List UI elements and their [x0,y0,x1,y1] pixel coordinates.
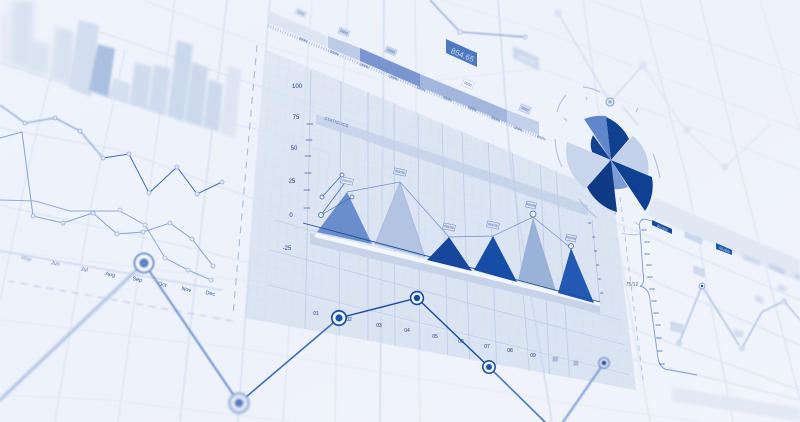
line segment final [563,363,604,422]
bar far-left blurred [0,12,9,64]
triangle tags: 000.00 [342,178,352,184]
bar 11 [185,62,208,127]
triangle 1 [317,192,372,244]
bracket scale ticks: 000 [646,263,652,267]
right dashed line [620,197,643,380]
bracket scale ticks: 000 [655,323,661,327]
axis: tick column right of main chart [588,220,604,304]
network hub node [606,98,614,106]
ruler tags: 0000 [387,48,395,55]
panel grid emphasis lines [268,70,630,385]
ruler tags: 0000 [464,81,472,88]
bar 13 [220,65,241,138]
bracket scale ticks: 000 [656,336,662,340]
right chart node: sharp [699,283,705,289]
ruler percent labels [298,37,546,142]
axis: tick column left of main chart: 0000 [305,154,312,158]
triangle 3 [427,237,472,271]
pie chart [566,116,653,212]
bottom number axis: 11 [573,361,579,367]
node: Sep peak [134,254,154,272]
bar 10 [167,40,193,122]
bar 9 [148,64,171,116]
ruler percent labels: 000% [490,116,500,123]
triangle 6 [558,248,594,303]
bracket scale ticks: 000 [644,240,650,244]
y axis labels: -25 [283,246,292,252]
bracket scale ticks: 000 [653,311,659,315]
node: 01 point [332,311,346,325]
bracket scale ticks: 000 [651,299,657,303]
bar 12 [203,79,223,132]
ruler percent labels: 000% [388,75,398,82]
bar chart: blurred top left [0,0,241,138]
bracket scale ticks [641,228,665,366]
main foreground line chart [0,263,604,422]
axis: tick column right of main chart: 00 [588,221,592,225]
right chart tags [671,266,786,338]
month axis [0,251,222,298]
line segment to low point [144,263,239,403]
triangle 2 [375,182,425,257]
value box: 854.65: 854.65 [449,46,476,64]
axis: tick column right of main chart: 00 [600,291,604,295]
node: last point [599,358,609,368]
triangle tags: 000.00 [566,235,576,241]
bar 5 [69,20,99,97]
tab pale 5 [769,263,785,275]
month labels [21,255,216,298]
value box: 854.65 [446,39,477,67]
pie medium bottom [611,160,628,189]
axis: tick column left of main chart: 0000 [304,188,311,192]
statistics band [316,114,588,216]
month labels: Nov [181,286,192,294]
triangle chart [317,182,594,303]
pie light left [566,142,611,188]
pie dark right [611,160,653,211]
value box: pale [513,46,539,71]
bar 6 dark [89,44,115,97]
triangle tags: 000.00 [444,224,454,230]
axis: tick column left of main chart: 0000 [306,138,313,142]
tab pale 2 [685,232,702,244]
top line with value boxes [430,0,527,39]
bottom number axis: 06 [458,339,464,345]
axis: tick column left of main chart: 0000 [307,122,314,126]
right chart nodes: blurred [676,298,787,351]
month labels: Dec [205,290,216,298]
bottom number axis [313,311,579,367]
line chart: left series 3 [0,200,213,282]
statistics band: STATISTICS [324,116,349,128]
axis: tick column right of main chart: 00 [594,249,598,253]
axis: tick column left of main chart: 0000 [305,171,312,175]
triangle 4 [474,236,517,282]
y axis labels: 50 [291,146,298,152]
bottom number axis: 09 [530,353,536,359]
bar 8 [129,62,152,110]
ruler percent labels: 000% [536,135,546,142]
tab pale 4 [743,254,760,266]
pie ring arcs [555,87,660,220]
node: descending point [483,361,495,373]
bracket scale ticks: 000 [644,252,650,256]
axis: tick column right of main chart: 00 [596,263,600,267]
month labels: May [21,255,32,263]
line segment blurred left [0,263,144,400]
y axis labels: 100 [292,84,303,90]
triangle nodes [318,173,574,248]
ruler percent labels: 000% [467,106,477,113]
bracket scale ticks: 000 [647,275,653,279]
bottom number axis: 02 [346,317,352,323]
pie small dark left [591,135,611,160]
y axis labels [283,84,303,252]
bottom number axis: 04 [404,328,410,334]
chart baseline shadow [310,233,600,313]
right line chart [679,286,800,348]
ruler percent labels: 000% [298,37,308,44]
line chart: left series 1 [0,105,224,196]
bracket scale ticks: 000 [657,349,663,353]
node: peak at 03-04 [411,292,423,304]
tab dark 3 [716,243,732,255]
bottom number axis: 01 [313,311,319,317]
bar 4 [50,26,74,85]
right tabs [652,220,800,280]
bracket scale ticks: 000 [649,287,655,291]
ruler percent labels: 000% [359,63,369,70]
bar 3 [28,40,50,76]
ruler percent labels: 000% [329,50,339,57]
chart baseline highlight [314,233,600,306]
ruler percent labels: 000% [416,86,426,93]
pie dark top right [606,117,629,160]
month labels: Aug [105,271,116,279]
right panel band [647,197,800,282]
panel: central shaded chart area [245,50,636,390]
axis: tick column left of main chart [304,122,314,210]
ruler tags: 0000 [521,106,529,113]
bar tall blurred [10,0,34,70]
curly bracket [622,219,697,375]
triangle tags: 000.00 [526,202,536,208]
chart baseline [303,223,600,302]
y axis labels: 25 [289,179,296,185]
line segment sharp [339,298,489,367]
line chart: left series 2 [0,132,215,268]
ruler tags: 0000 [340,29,348,36]
bottom number axis: 05 [432,334,438,340]
bottom right pale band [672,387,800,422]
axis: tick column right of main chart: 00 [598,277,602,281]
line segment rising [239,318,339,403]
month labels: Jul [80,266,88,274]
triangle connector lines [321,175,571,248]
dashed frame left [8,45,257,321]
ruler tags: 0000 [297,10,305,17]
triangle 5 [518,217,556,291]
ruler band [268,8,546,142]
ruler tags [294,8,531,114]
axis: tick column left of main chart: 0000 [304,206,311,210]
tab pale 6 [795,273,800,280]
bracket scale ticks: 000 [659,362,665,366]
tab dark 1: 00.00% [656,224,669,232]
pie medium top left [584,116,611,160]
network lines top right [558,13,770,167]
month labels: Sep [132,276,143,284]
axis: tick column right of main chart: 00 [592,235,596,239]
pie dark bottom [587,160,617,212]
bracket label: 75/12 [626,282,638,288]
value box: pale: 000.00 [517,54,537,67]
bottom number axis: 03 [376,323,382,329]
y axis labels: 75 [293,115,300,121]
month labels: Oct [157,281,167,289]
node: low point [230,394,248,412]
ruler percent labels: 000% [513,126,523,133]
line segment descending [489,367,545,422]
ruler percent labels: 000% [442,96,452,103]
tab dark 3: 00.00% [718,246,731,254]
bottom number axis: 10 [552,357,558,363]
triangle tags [341,168,577,242]
bottom number axis: 07 [484,344,490,350]
tab dark 1 [652,220,672,234]
triangle tags: 000.00 [395,169,405,175]
network nodes [555,10,728,170]
pie light right [611,136,648,175]
bracket scale ticks: 000 [641,228,647,232]
triangle tags: 000.00 [488,222,498,228]
month labels: Jun [50,260,60,268]
y axis labels: 0 [289,213,293,219]
bar 7 [108,78,130,104]
bottom number axis: 08 [507,348,513,354]
